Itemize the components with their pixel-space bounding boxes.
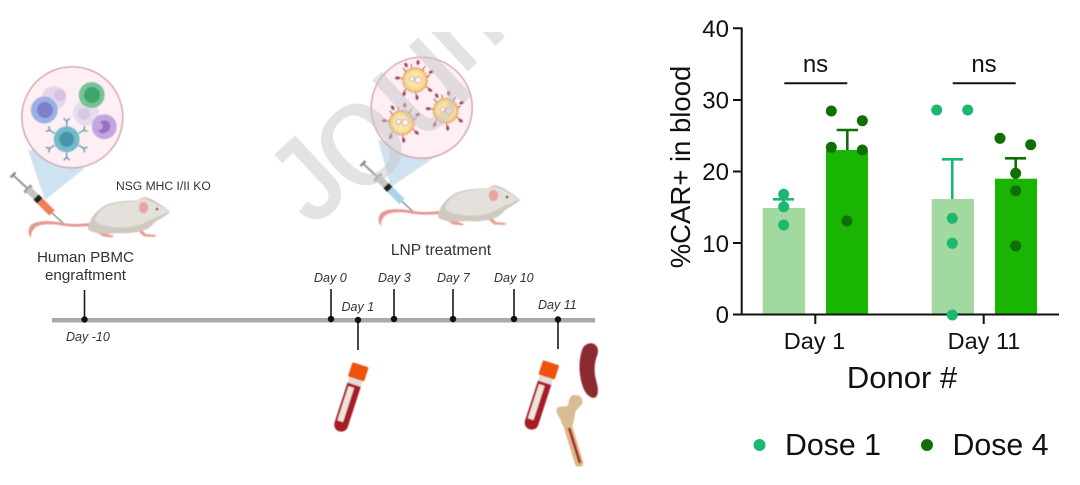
- legend: Dose 1: [785, 429, 881, 462]
- significance: day 1: [784, 51, 847, 83]
- error bars: [773, 130, 1026, 208]
- circle: human immune cells: [22, 67, 123, 168]
- icon: blood tube day 1: [331, 362, 369, 434]
- x-axis group labels: Day 11: [948, 328, 1020, 354]
- axes: [733, 28, 1059, 324]
- x-axis group labels: Day 1: [784, 328, 845, 354]
- label: Human PBMC engraftment: engraftment: [45, 267, 127, 284]
- timeline: Day -10: [66, 330, 110, 344]
- panel: experiment schematic: [10, 57, 598, 463]
- label: LNP treatment: LNP treatment: [391, 242, 492, 259]
- y-axis tick labels: 20: [702, 159, 729, 186]
- icon: femur bone: [556, 395, 583, 463]
- y-axis tick labels: 30: [702, 88, 729, 114]
- timeline: Day 7: [437, 271, 471, 285]
- icon: syringe (blue): [360, 161, 414, 212]
- timeline: [52, 271, 595, 350]
- y-axis tick labels: [702, 16, 729, 329]
- y-axis tick labels: 10: [702, 231, 729, 258]
- y-axis title: %CAR+ in blood: [665, 66, 696, 268]
- icon: syringe (orange): [10, 172, 64, 224]
- icon: mouse: [29, 197, 170, 238]
- icon: spleen: [579, 343, 598, 398]
- watermark: Journal: J: [243, 114, 370, 245]
- panel: bar chart of %CAR+ in blood: [665, 16, 1059, 462]
- significance: day 1: ns: [803, 51, 828, 78]
- y-axis tick labels: 40: [702, 16, 729, 43]
- timeline: Day 11: [538, 298, 577, 312]
- legend: Dose 4: [952, 429, 1048, 462]
- icon: mouse: [379, 185, 520, 226]
- label: mouse strain: NSG MHC I/II KO: [116, 179, 211, 193]
- data points: dose 4: [826, 106, 1036, 252]
- y-axis tick labels: 0: [716, 302, 729, 329]
- data points: dose 1: [778, 104, 973, 320]
- timeline: Day 3: [378, 271, 411, 285]
- x-axis group labels: [784, 328, 1020, 354]
- label: Human PBMC engraftment: Human PBMC: [37, 249, 134, 266]
- significance: day 11: ns: [971, 51, 997, 78]
- bars: [763, 150, 1037, 314]
- timeline: Day 0: [314, 271, 347, 285]
- projection cone: [378, 140, 435, 187]
- circle: lipid nanoparticles: [371, 57, 472, 158]
- projection cone: [28, 150, 85, 200]
- illustration: PBMC engraftment mouse: [10, 67, 170, 238]
- icon: blood tube day 11: [521, 360, 559, 432]
- x-axis title: Donor #: [847, 360, 958, 395]
- timeline: Day 1: [342, 300, 374, 314]
- significance: day 11: [953, 51, 1016, 83]
- timeline: Day 10: [494, 271, 534, 285]
- legend: [754, 429, 1048, 462]
- illustration: LNP treatment mouse: [360, 57, 520, 226]
